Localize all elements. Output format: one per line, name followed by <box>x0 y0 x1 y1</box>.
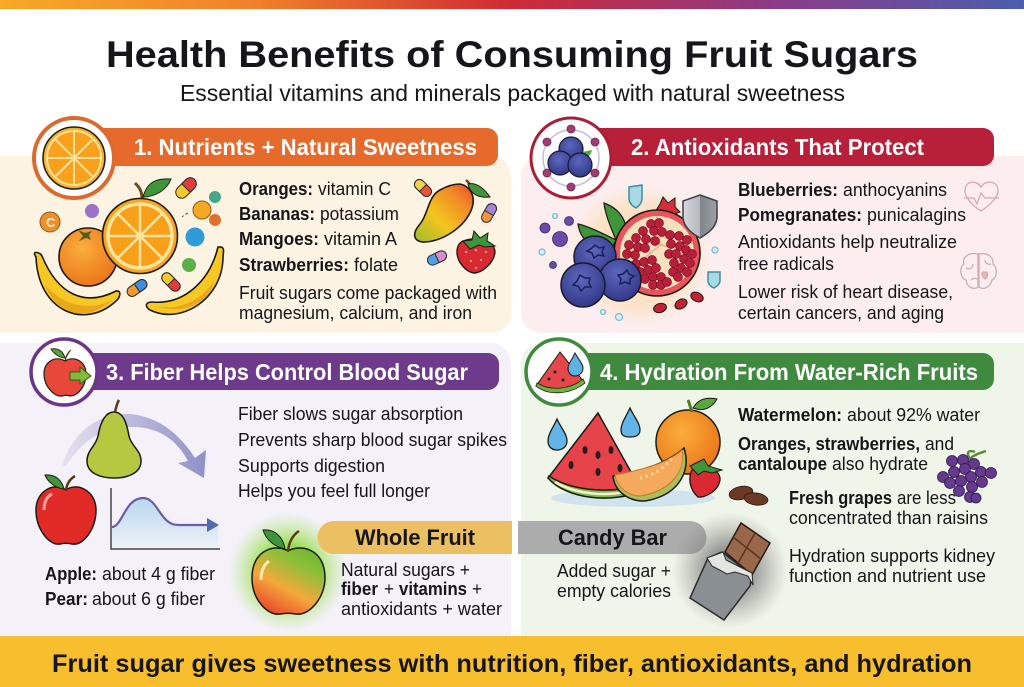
text: whole fruit: antioxidants + water <box>341 599 502 619</box>
panel: fiber <box>0 339 512 636</box>
text: fiber benefits: Prevents sharp blood sugar spikes <box>238 430 507 450</box>
text: fiber amounts: about 6 g fiber <box>92 589 205 609</box>
icon: whole fruit apple <box>228 512 348 632</box>
panel: antioxidants <box>521 118 1024 333</box>
section 3 banner: 3. Fiber Helps Control Blood Sugar <box>106 359 468 385</box>
section 1 banner <box>34 118 498 198</box>
text: hydration: about 92% water <box>847 405 980 425</box>
text: whole fruit: fiber <box>341 579 378 599</box>
section 4 banner <box>526 339 994 405</box>
text: whole fruit: vitamins <box>399 579 467 599</box>
text: antioxidants: punicalagins <box>867 205 966 225</box>
icon: heart pulse <box>964 182 999 211</box>
text: nutrients: vitamin C <box>318 179 391 199</box>
text: fiber benefits <box>238 404 507 501</box>
text: nutrients <box>239 179 497 323</box>
text: nutrients: vitamin A <box>324 229 397 249</box>
text: hydration: function and nutrient use <box>789 566 986 586</box>
text: nutrients: Oranges: <box>239 179 313 199</box>
illustration: hydrating fruits <box>548 398 769 507</box>
text: fiber amounts: about 4 g fiber <box>102 564 215 584</box>
text: fiber amounts <box>45 564 215 609</box>
text: whole fruit: + <box>384 579 394 599</box>
section 3 banner <box>31 339 499 405</box>
text: antioxidants: Blueberries: <box>738 180 838 200</box>
text: hydration: Watermelon: <box>738 405 842 425</box>
text: antioxidants: Pomegranates: <box>738 205 862 225</box>
text: hydration: also hydrate <box>832 454 928 474</box>
text: candy bar: empty calories <box>557 581 671 601</box>
text: nutrients: magnesium, calcium, and iron <box>239 303 472 323</box>
text: fiber amounts: Apple: <box>45 564 97 584</box>
section 2 banner: 2. Antioxidants That Protect <box>631 134 924 160</box>
text: hydration: Hydration supports kidney <box>789 546 995 566</box>
arrow: curved from apple to chart <box>62 414 206 478</box>
text: hydration: Fresh grapes <box>789 488 892 508</box>
section 4 banner: 4. Hydration From Water-Rich Fruits <box>600 359 978 385</box>
label: candy bar: Candy Bar <box>558 525 667 550</box>
footer banner: Fruit sugar gives sweetness with nutrition, fiber, antioxidants, and hydration <box>52 650 972 678</box>
text: candy bar <box>557 561 671 601</box>
label: candy bar <box>518 521 707 554</box>
text: nutrients: Bananas: <box>239 204 315 224</box>
label: whole fruit: Whole Fruit <box>355 525 476 550</box>
icon: brain <box>961 254 996 288</box>
illustration: oranges, bananas, nutrient capsules: C <box>46 215 56 230</box>
text: fiber benefits: Helps you feel full longer <box>238 481 430 501</box>
footer banner <box>0 636 1024 687</box>
subtitle: Essential vitamins and minerals packaged with natural sweetness <box>180 80 845 106</box>
text: nutrients: potassium <box>320 204 399 224</box>
chart: blood sugar curve <box>111 488 220 549</box>
icon: chocolate bar <box>672 512 788 628</box>
panel: nutrients <box>0 118 511 333</box>
title: Health Benefits of Consuming Fruit Sugars <box>106 34 918 75</box>
text: hydration: concentrated than raisins <box>789 508 988 528</box>
text: hydration: are less <box>897 488 956 508</box>
text: hydration: and <box>925 434 954 454</box>
text: nutrients: Fruit sugars come packaged with <box>239 283 497 303</box>
text: antioxidants: Antioxidants help neutralize <box>738 232 957 252</box>
text: fiber benefits: Fiber slows sugar absorption <box>238 404 463 424</box>
text: antioxidants: free radicals <box>738 254 834 274</box>
icon: apple <box>36 475 96 544</box>
panel: hydration <box>518 339 1024 636</box>
illustration: blueberries and pomegranate <box>539 183 720 327</box>
text: hydration <box>738 405 995 586</box>
text: hydration: Oranges, strawberries, <box>738 434 920 454</box>
label: whole fruit <box>318 521 512 554</box>
text: fiber amounts: Pear: <box>45 589 88 609</box>
section 1 banner: 1. Nutrients + Natural Sweetness <box>134 134 477 160</box>
icon: grapes <box>938 451 996 503</box>
top gradient bar <box>0 0 1024 9</box>
text: antioxidants: Lower risk of heart disease, <box>738 282 953 302</box>
icon: pear <box>87 400 141 478</box>
text: nutrients: Mangoes: <box>239 229 319 249</box>
text: whole fruit <box>341 560 502 619</box>
text: whole fruit: Natural sugars + <box>341 560 470 580</box>
text: fiber benefits: Supports digestion <box>238 456 385 476</box>
text: nutrients: Strawberries: <box>239 255 349 275</box>
illustration: oranges, bananas, nutrient capsules <box>35 175 498 315</box>
text: antioxidants: certain cancers, and aging <box>738 303 944 323</box>
section 2 banner <box>531 118 994 198</box>
text: nutrients: folate <box>354 255 398 275</box>
text: hydration: cantaloupe <box>738 454 827 474</box>
text: whole fruit: + <box>472 579 482 599</box>
text: antioxidants: anthocyanins <box>843 180 947 200</box>
text: candy bar: Added sugar + <box>557 561 671 581</box>
text: antioxidants <box>738 180 966 323</box>
